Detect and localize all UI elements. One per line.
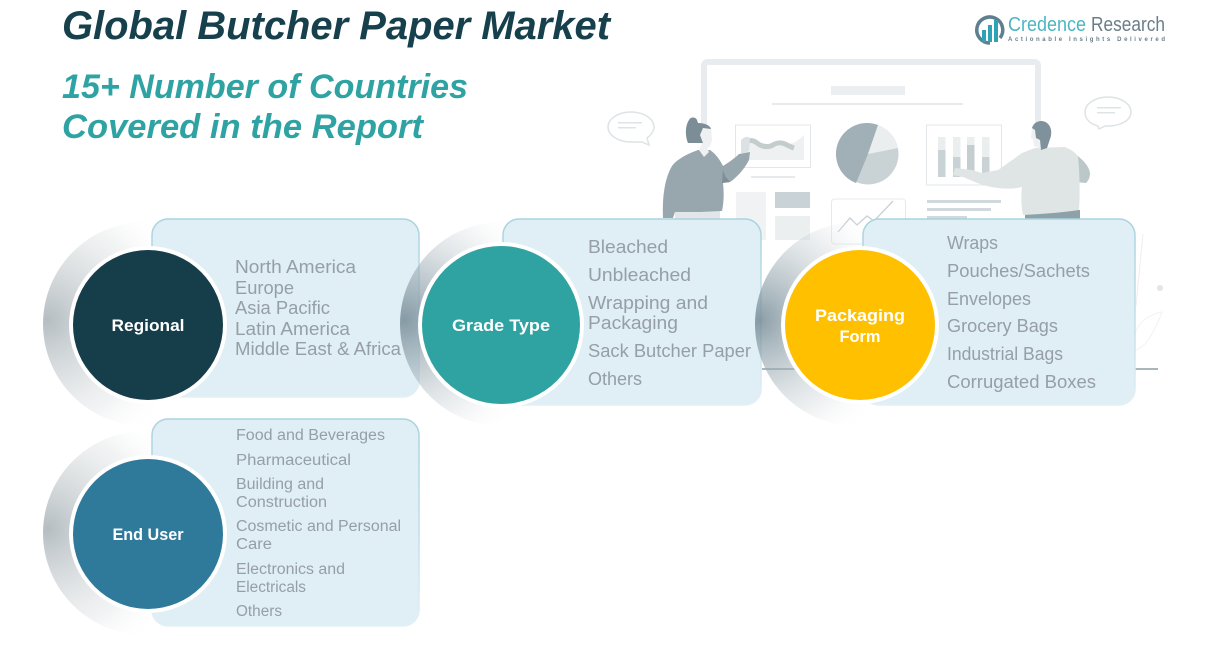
- list: packaging forms: [947, 232, 1096, 392]
- list: end users: Food and Beverages: [236, 427, 385, 444]
- list: regions: Asia Pacific: [235, 297, 330, 318]
- subtitle: 15+ Number of Countries: [62, 68, 468, 106]
- decorative crescent: [43, 431, 247, 635]
- pie chart: [836, 123, 898, 184]
- list: regions: Middle East & Africa: [235, 338, 402, 359]
- logo: Credence Research: Credence: [1008, 14, 1086, 36]
- screen frame: [704, 62, 1038, 125]
- list: packaging forms: Pouches/Sachets: [947, 260, 1090, 281]
- segment: End User: [43, 419, 419, 635]
- list: grade types: [588, 236, 751, 389]
- presenter: man: [953, 121, 1090, 219]
- decorative crescent: [43, 222, 247, 426]
- list: packaging forms: Grocery Bags: [947, 315, 1058, 336]
- list: regions: [235, 256, 402, 359]
- circle badge: End User: [69, 455, 227, 613]
- circle badge: Grade Type: [418, 242, 584, 408]
- lower blocks: [736, 192, 766, 240]
- list: regions: Europe: [235, 277, 294, 298]
- panel: Regional: [152, 219, 419, 397]
- list: end users: Others: [236, 603, 282, 620]
- list: grade types: Sack Butcher Paper: [588, 340, 751, 361]
- list: grade types: Wrapping and: [588, 292, 708, 313]
- decorative crescent: [755, 222, 959, 426]
- subtitle: [62, 68, 468, 146]
- panel: Grade Type: [503, 219, 761, 405]
- circle badge: Packaging Form: Packaging: [815, 306, 905, 325]
- speech bubble right: [1085, 97, 1131, 129]
- ground line and plant: [762, 234, 1163, 370]
- list: end users: Electricals: [236, 579, 306, 596]
- list: packaging forms: Envelopes: [947, 288, 1031, 309]
- background illustration: presenters at a dashboard: [608, 62, 1163, 370]
- list: end users: [236, 427, 401, 620]
- circle badge: Regional: [69, 246, 227, 404]
- panel: End User: [152, 419, 419, 626]
- list: grade types: Bleached: [588, 236, 668, 257]
- segment: Packaging Form: [755, 219, 1135, 426]
- list: end users: Care: [236, 536, 272, 553]
- logo: Credence Research: [977, 14, 1165, 43]
- list: end users: Cosmetic and Personal: [236, 518, 401, 535]
- circle badge: Regional: Regional: [112, 316, 184, 335]
- list: packaging forms: Wraps: [947, 232, 998, 253]
- presenter: woman: [663, 118, 750, 219]
- list: end users: Electronics and: [236, 561, 345, 578]
- list: grade types: Packaging: [588, 312, 678, 333]
- speech bubble left: [608, 112, 654, 145]
- circle badge: Packaging Form: [781, 246, 939, 404]
- list: end users: Construction: [236, 494, 327, 511]
- decorative crescent: [400, 222, 604, 426]
- wave chart: [736, 125, 810, 178]
- segment: Regional: [43, 219, 419, 426]
- list: regions: North America: [235, 256, 357, 277]
- bar chart: [926, 125, 1002, 185]
- circle badge: Packaging Form: Form: [840, 327, 880, 346]
- list: packaging forms: Industrial Bags: [947, 343, 1063, 364]
- title: Global Butcher Paper Market: [62, 4, 612, 48]
- logo: Credence Research: Actionable Insights Delivered: [1008, 37, 1165, 43]
- list: grade types: Unbleached: [588, 264, 691, 285]
- list: packaging forms: Corrugated Boxes: [947, 371, 1096, 392]
- list: regions: Latin America: [235, 318, 351, 339]
- circle badge: End User: End User: [112, 525, 184, 544]
- segment: Grade Type: [400, 219, 761, 426]
- panel: Packaging Form: [863, 219, 1135, 405]
- subtitle: Covered in the Report: [62, 108, 425, 146]
- circle badge: Grade Type: Grade Type: [452, 316, 550, 335]
- list: end users: Pharmaceutical: [236, 452, 351, 469]
- list: grade types: Others: [588, 368, 642, 389]
- logo: Credence Research: Research: [1091, 14, 1165, 36]
- list: end users: Building and: [236, 476, 324, 493]
